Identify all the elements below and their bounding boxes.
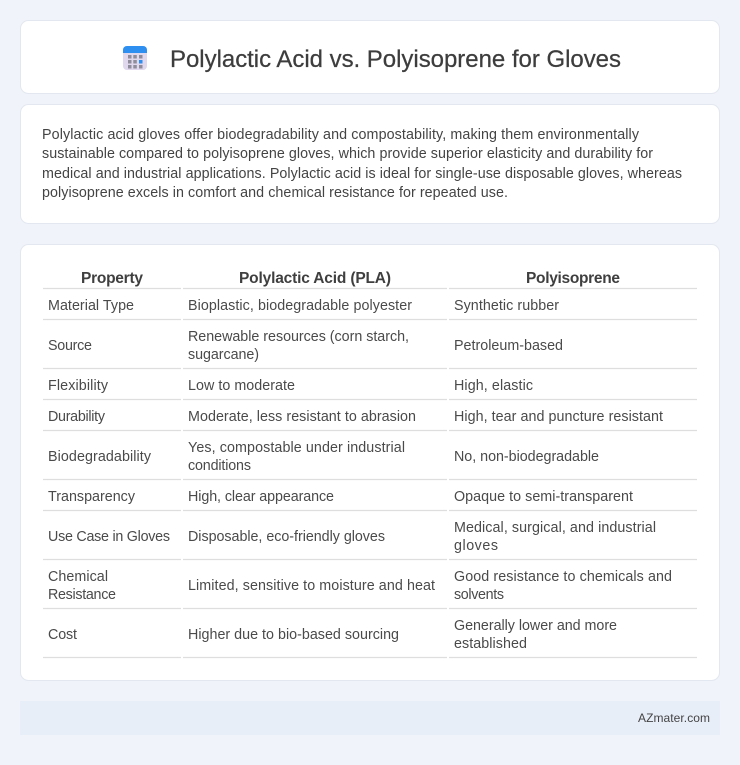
- row: flexibility: [48, 378, 533, 394]
- row: source: [48, 329, 563, 363]
- row: material type: Synthetic rubber: [454, 298, 559, 314]
- row: durability: Durability: [48, 409, 106, 425]
- row: material type: Material Type: [48, 298, 134, 314]
- row: biodegradability: Yes, compostable under industrial: [188, 440, 405, 456]
- row: chemical resistance: [48, 569, 672, 603]
- row: chemical resistance: Resistance: [48, 587, 116, 603]
- row: chemical resistance: Chemical: [48, 569, 108, 585]
- title: Polylactic Acid vs. Polyisoprene for Gloves: [170, 46, 621, 73]
- row: flexibility: High, elastic: [454, 378, 533, 394]
- icon: calendar: [123, 46, 147, 70]
- summary text: sustainable compared to polyisoprene gloves, which provide superior elasticity and durability for: [42, 146, 653, 162]
- row: cost: [48, 618, 617, 652]
- table header: Property: [81, 270, 143, 287]
- row: use case in gloves: Disposable, eco-friendly gloves: [188, 529, 385, 545]
- row: cost: Generally lower and more: [454, 618, 617, 634]
- row: source: Renewable resources (corn starch,: [188, 329, 409, 345]
- row: use case in gloves: [48, 520, 656, 554]
- table grid lines: [43, 288, 697, 658]
- row: biodegradability: Biodegradability: [48, 449, 152, 465]
- footer bar: [20, 701, 720, 735]
- row: source: Source: [48, 338, 92, 354]
- summary text: Polylactic acid gloves offer biodegradability and compostability, making them environmentally: [42, 127, 640, 143]
- summary text: [42, 127, 682, 201]
- row: chemical resistance: Limited, sensitive to moisture and heat: [188, 578, 435, 594]
- row: use case in gloves: Medical, surgical, and industrial: [454, 520, 656, 536]
- row: use case in gloves: Use Case in Gloves: [48, 529, 170, 545]
- row: transparency: High, clear appearance: [188, 489, 334, 505]
- row: transparency: Opaque to semi-transparent: [454, 489, 633, 505]
- row: biodegradability: conditions: [188, 458, 251, 474]
- summary text: medical and industrial applications. Polylactic acid is ideal for single-use disposable gloves, whereas: [42, 166, 682, 182]
- row: cost: Cost: [48, 627, 77, 643]
- row: biodegradability: [48, 440, 599, 474]
- panel: comparison table: [20, 244, 720, 680]
- row: flexibility: Flexibility: [48, 378, 109, 394]
- row: flexibility: Low to moderate: [188, 378, 295, 394]
- row: cost: established: [454, 636, 527, 652]
- row: chemical resistance: solvents: [454, 587, 504, 603]
- row: material type: Bioplastic, biodegradable polyester: [188, 298, 412, 314]
- table header: Polylactic Acid (PLA): [239, 270, 391, 287]
- row: use case in gloves: gloves: [454, 538, 498, 554]
- table header: [81, 270, 620, 287]
- footer text: AZmater.com: [638, 711, 710, 725]
- row: source: sugarcane): [188, 347, 259, 363]
- row: durability: Moderate, less resistant to abrasion: [188, 409, 416, 425]
- row: biodegradability: No, non-biodegradable: [454, 449, 599, 465]
- summary text: polyisoprene excels in comfort and chemical resistance for repeated use.: [42, 185, 508, 201]
- panel: title card: [20, 20, 720, 94]
- row: material type: [48, 298, 559, 314]
- row: durability: High, tear and puncture resistant: [454, 409, 663, 425]
- row: transparency: Transparency: [48, 489, 136, 505]
- row: transparency: [48, 489, 633, 505]
- row: chemical resistance: Good resistance to chemicals and: [454, 569, 672, 585]
- row: source: Petroleum-based: [454, 338, 563, 354]
- row: cost: Higher due to bio-based sourcing: [188, 627, 399, 643]
- row: durability: [48, 409, 663, 425]
- table header: Polyisoprene: [526, 270, 620, 287]
- panel: summary: [20, 104, 720, 224]
